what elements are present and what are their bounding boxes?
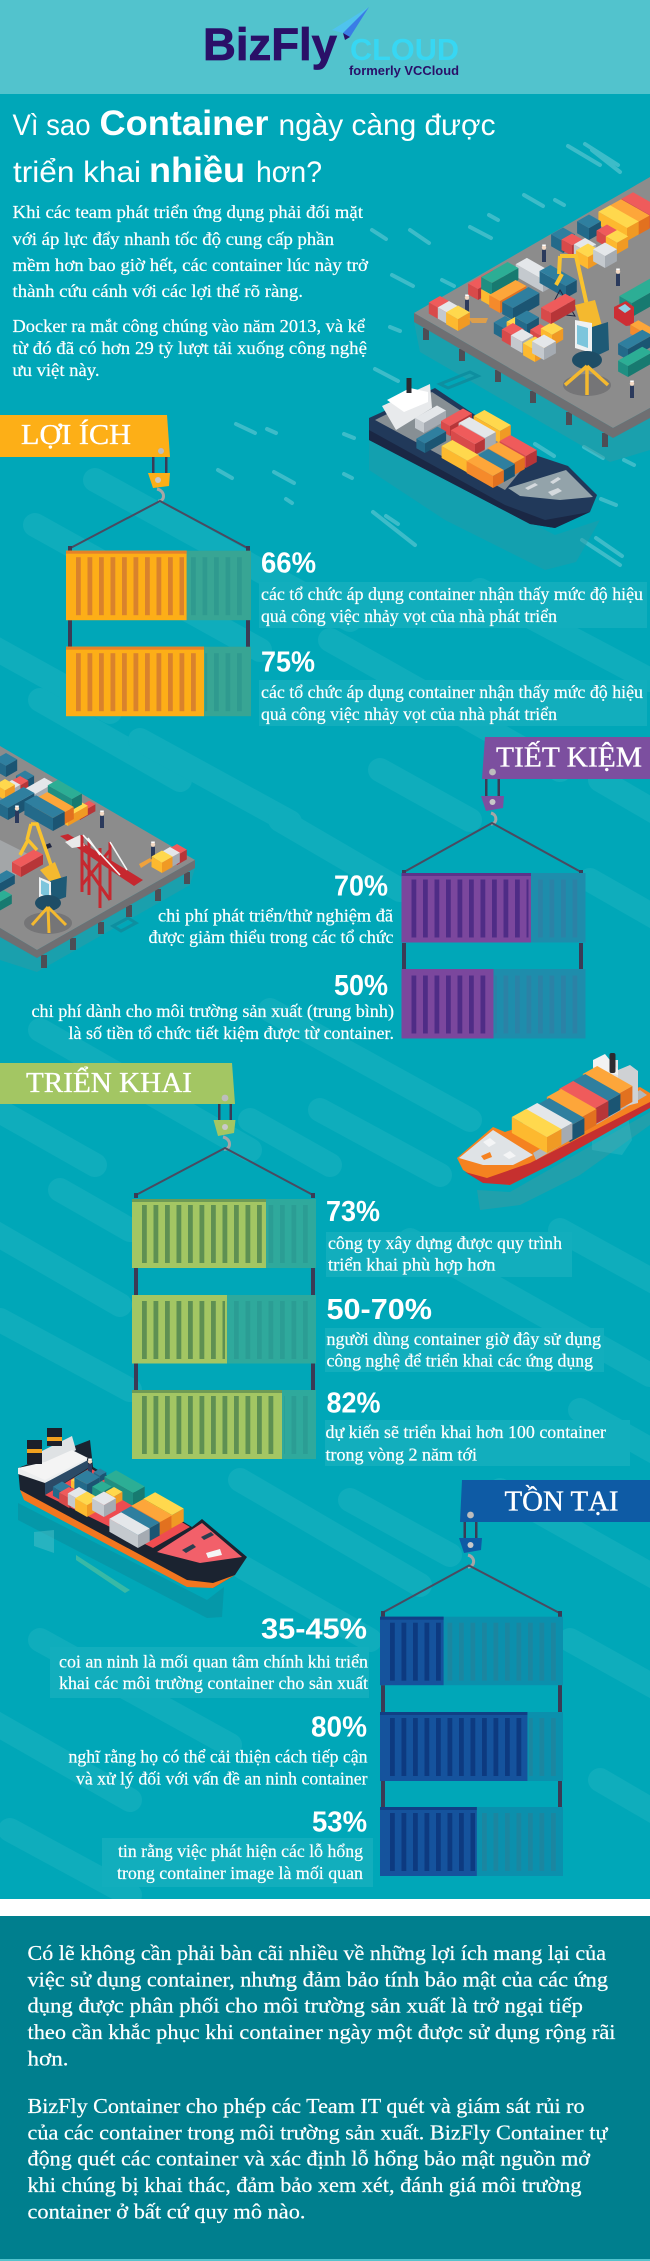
stat: 82%: trong vòng 2 năm tới — [326, 1444, 477, 1464]
intro paragraph: Docker — [12, 316, 367, 380]
intro paragraph: thành cứu cánh với các lợi thế rõ ràng. — [12, 281, 303, 301]
container bar 80% — [380, 1712, 563, 1781]
section banner: Lợi ích — [0, 415, 170, 457]
title: Container — [100, 104, 269, 143]
decorative water dashes — [218, 144, 634, 565]
stat: 82%: 82% — [326, 1388, 381, 1420]
white divider band — [0, 1899, 650, 1916]
closing paragraph 2: BizFly Container cho phép các Team IT quét và giám sát rủi ro — [28, 2094, 584, 2118]
logo: BizFly Cloud — [203, 7, 459, 78]
logo: BizFly Cloud: BizFly — [203, 19, 337, 70]
crane hook: Lợi ích — [70, 448, 248, 548]
stat: 75%: các tổ chức áp dụng container nhận thấy mức độ hiệu — [261, 682, 643, 702]
stat: 50-70%: công nghệ để triển khai các ứng dụng — [326, 1350, 593, 1370]
stat: 53% — [117, 1806, 367, 1883]
container bar 75% — [66, 647, 251, 716]
intro paragraph: Docker: ưu việt này. — [12, 360, 100, 380]
header band — [0, 0, 650, 94]
stat: 80%: nghĩ rằng họ có thể cải thiện cách tiếp cận — [68, 1746, 368, 1766]
closing paragraph 1: dụng được phân phối cho môi trường sản xuất là trở ngại tiếp — [28, 1994, 583, 2018]
stat: 70%: chi phí phát triển/thử nghiệm đã — [158, 906, 393, 926]
illustration: port dock top right — [414, 177, 650, 462]
illustration: orange cargo ship — [457, 1053, 650, 1210]
crane hook: Tồn tại — [382, 1512, 560, 1613]
stat: 73%: công ty xây dựng được quy trình — [328, 1233, 562, 1253]
container stack: Tồn tại — [380, 1611, 563, 1876]
closing paragraph 1: theo cần khắc phục khi container ngày một được sử dụng rộng rãi — [28, 2020, 616, 2044]
title: nhiều — [149, 151, 245, 190]
title: hơn? — [256, 156, 322, 189]
container stack: Lợi ích — [66, 546, 251, 716]
container bar 35-45% — [380, 1617, 563, 1685]
stat: 35-45%: khai các môi trường container cho sản xuất — [59, 1673, 368, 1693]
crane hook: Tiết kiệm — [404, 769, 581, 872]
stat: 50%: 50% — [334, 970, 388, 1002]
stat: 35-45% — [59, 1614, 368, 1693]
container bar 66% — [66, 551, 251, 620]
closing paragraph 2: khi chúng bị khai thác, đảm bảo xem xét, đánh giá môi trường — [28, 2173, 582, 2197]
section banner: Tồn tại: TỒN TẠI — [504, 1484, 618, 1518]
title — [12, 104, 496, 190]
container stack: Tiết kiệm — [402, 870, 586, 1038]
stat: 70%: được giảm thiểu trong các tổ chức — [148, 927, 394, 947]
stat: 50% — [32, 970, 394, 1043]
section banner: Triển khai: TRIỂN KHAI — [26, 1066, 192, 1099]
container bar 82% — [132, 1390, 316, 1459]
intro paragraph — [12, 202, 369, 301]
closing panel — [0, 1916, 650, 2261]
stat: 66%: các tổ chức áp dụng container nhận thấy mức độ hiệu — [261, 584, 643, 604]
intro paragraph: mềm hơn bao giờ hết, các container lúc này trở — [12, 255, 369, 275]
closing paragraph 1: việc sử dụng container, nhưng đảm bảo tính bảo mật của các ứng — [28, 1968, 609, 1992]
stat: 73%: 73% — [326, 1196, 380, 1228]
stat: 53%: trong container image là mối quan — [117, 1863, 363, 1883]
closing paragraph 1: Có lẽ không cần phải bàn cãi nhiều về những lợi ích mang lại của — [28, 1941, 607, 1965]
title: triển khai — [13, 156, 141, 189]
stat: 66%: quả công việc nhảy vọt của nhà phát triển — [261, 606, 557, 626]
stat: 50%: là số tiền tổ chức tiết kiệm được từ container. — [68, 1023, 394, 1043]
title: ngày càng được — [278, 109, 496, 142]
section banner: Lợi ích: LỢI ÍCH — [21, 418, 131, 451]
stat: 35-45%: 35-45% — [261, 1614, 367, 1646]
illustration: red-deck cargo ship — [18, 1428, 247, 1618]
stat: 75% — [261, 646, 643, 724]
stat: 80% — [68, 1712, 368, 1788]
container bar 53% — [380, 1807, 563, 1876]
stat: 82%: dự kiến sẽ triển khai hơn 100 container — [326, 1422, 606, 1442]
stat: 73% — [326, 1196, 562, 1274]
section banner: Tiết kiệm: TIẾT KIỆM — [496, 740, 642, 774]
intro paragraph: Docker: từ đó đã có hơn 29 tỷ lượt tải xuống công nghệ — [12, 338, 367, 358]
stat: 75%: quả công việc nhảy vọt của nhà phát triển — [261, 704, 557, 724]
stat: 75%: 75% — [261, 646, 315, 678]
stat: 53%: tin rằng việc phát hiện các lỗ hổng — [118, 1841, 363, 1861]
container bar 50-70% — [132, 1295, 316, 1364]
stat: 50%: chi phí dành cho môi trường sản xuất (trung bình) — [32, 1001, 394, 1022]
closing paragraph 1 — [28, 1941, 616, 2070]
container bar 70% — [402, 873, 586, 942]
container stack: Triển khai — [132, 1193, 316, 1459]
logo: BizFly Cloud: CLOUD — [350, 32, 459, 67]
section banner: Tiết kiệm — [482, 737, 650, 779]
stat: 70%: 70% — [334, 870, 388, 902]
closing paragraph 2: động quét các container và xác định lỗ hổng bảo mật nguồn mở — [28, 2146, 591, 2170]
stat: 53%: 53% — [312, 1806, 367, 1838]
container bar 73% — [132, 1199, 316, 1268]
container bar 50% — [402, 969, 586, 1038]
closing paragraph 2: của các container trong môi trường sản xuất. BizFly Container tự — [28, 2120, 608, 2144]
intro paragraph: với áp lực đẩy nhanh tốc độ cung cấp phần — [12, 229, 334, 249]
intro paragraph: Khi các team phát triển ứng dụng phải đối mặt — [12, 202, 363, 222]
stat: 66%: 66% — [261, 548, 316, 580]
section banner: Triển khai — [0, 1063, 235, 1104]
stat: 50-70%: người dùng container giờ đây sử dụng — [326, 1329, 601, 1349]
stat: 70% — [148, 870, 394, 947]
logo: BizFly Cloud: formerly VCCloud — [349, 63, 459, 78]
title: Vì sao — [12, 109, 90, 142]
logo plane icon — [332, 7, 369, 40]
stat: 35-45%: coi an ninh là mối quan tâm chính khi triển — [59, 1652, 368, 1672]
closing paragraph 2 — [28, 2094, 608, 2224]
section banner: Tồn tại — [460, 1480, 650, 1522]
illustration: dark navy cargo ship — [369, 378, 600, 570]
illustration: port dock mid left — [0, 746, 195, 972]
crane hook: Triển khai — [136, 1095, 313, 1195]
stat: 50-70% — [326, 1294, 601, 1370]
stat: 82% — [326, 1388, 606, 1464]
text backing plates — [50, 582, 647, 1887]
stat: 80%: 80% — [311, 1712, 367, 1744]
stat: 50-70%: 50-70% — [326, 1294, 432, 1326]
closing paragraph 1: hơn. — [28, 2046, 68, 2070]
closing paragraph 2: container ở bất cứ quy mô nào. — [28, 2200, 306, 2224]
intro paragraph: Docker: Docker ra mắt công chúng vào năm 2013, và kể — [12, 316, 365, 336]
stat: 66% — [261, 548, 643, 626]
stat: 73%: triển khai phù hợp hơn — [328, 1254, 496, 1274]
stat: 80%: và xử lý đối với vấn đề an ninh container — [76, 1768, 368, 1788]
